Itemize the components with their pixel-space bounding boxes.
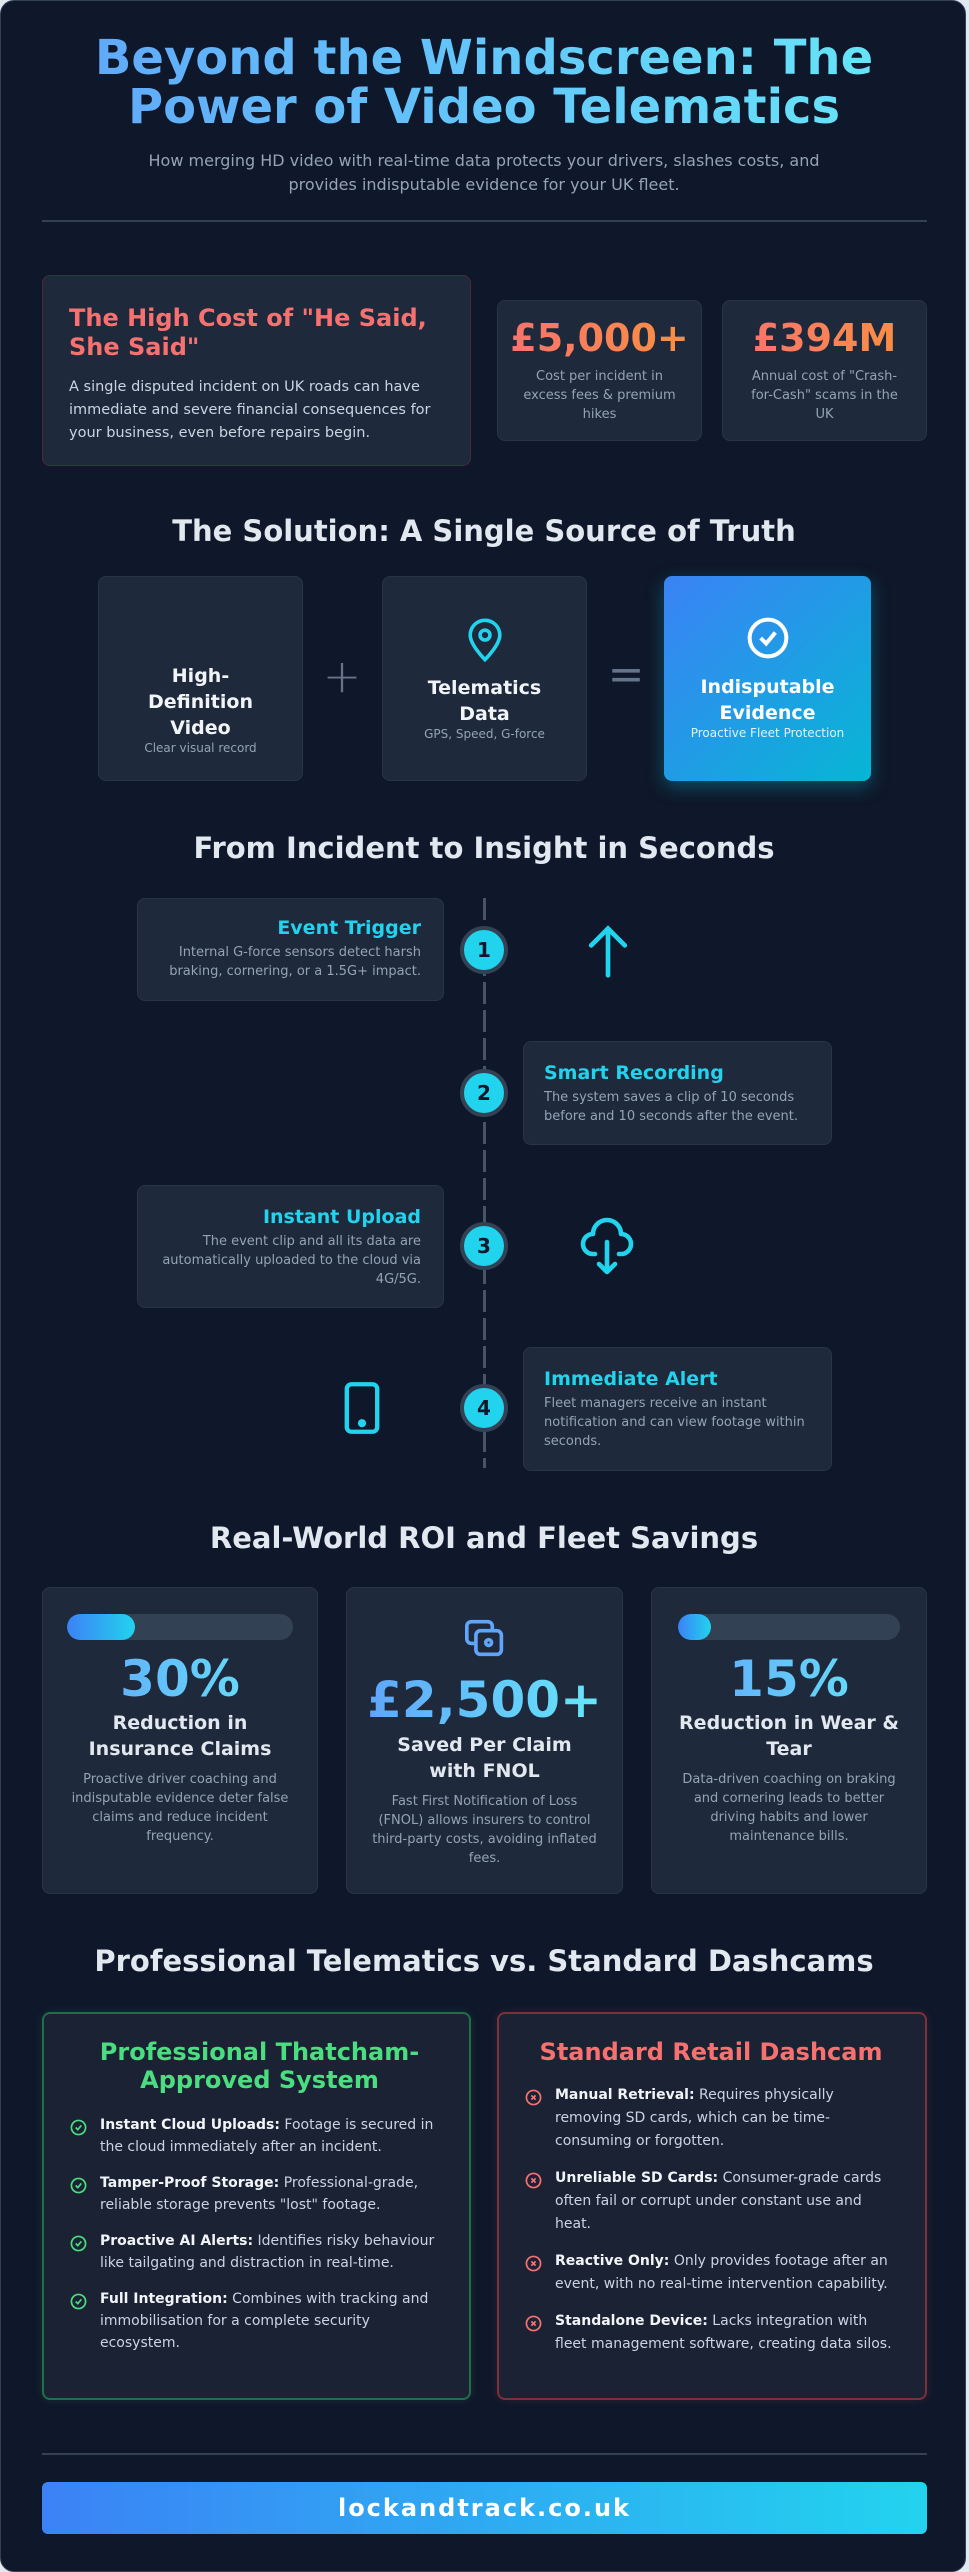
box: evidence: Indisputable — [700, 676, 835, 698]
panel: standard — [497, 2012, 927, 2400]
panel: standard: Reactive Only: Only provides footage after an event, with no real-time intervention capability. — [555, 2253, 888, 2292]
step 3 number — [460, 1222, 508, 1270]
step 1 number — [460, 926, 508, 974]
step 2 number: 2 — [477, 1081, 491, 1105]
heading: comparison: Professional Telematics vs. Standard Dashcams — [94, 1944, 874, 1978]
ROI card 1: Proactive driver coaching and indisputable evidence deter false claims and reduce incident frequency. — [72, 1772, 288, 1844]
heading: ROI: Real-World ROI and Fleet Savings — [210, 1521, 758, 1555]
step 4 card: Fleet managers receive an instant notification and can view footage within seconds. — [544, 1396, 805, 1449]
panel: professional: Full Integration: Combines with tracking and immobilisation for a complete security ecosystem. — [100, 2291, 428, 2351]
icon: check — [748, 618, 788, 658]
step 2 card — [523, 1041, 832, 1145]
ROI card 1: 30% — [120, 1650, 240, 1708]
panel: professional: Instant Cloud Uploads: Footage is secured in the cloud immediately after an incident. — [100, 2117, 433, 2155]
step 1 card: Event Trigger — [277, 917, 421, 939]
ROI card 3: Reduction in Wear & Tear — [679, 1712, 899, 1760]
subtitle: How merging HD video with real-time data protects your drivers, slashes costs, and provides indisputable evidence for your UK fleet. — [149, 151, 819, 194]
icon: phone — [344, 1382, 380, 1434]
box: evidence: Proactive Fleet Protection — [691, 726, 844, 740]
box: telematics: Data — [459, 703, 510, 725]
ROI card 2: £2,500+ — [367, 1671, 602, 1729]
step 3 card: Instant Upload — [263, 1206, 421, 1228]
panel: standard: removing SD cards, which can be time-consuming or forgotten. — [555, 2110, 830, 2149]
panel: standard: Manual Retrieval: Requires physically — [555, 2087, 834, 2103]
step 2 card: The system saves a clip of 10 seconds before and 10 seconds after the event. — [544, 1090, 798, 1124]
icon: cloud — [580, 1218, 634, 1274]
heading: timeline: From Incident to Insight in Seconds — [194, 831, 774, 865]
ROI card 1: Reduction in — [113, 1712, 247, 1734]
box: telematics: GPS, Speed, G-force — [424, 727, 545, 741]
step 1 card: Internal G-force sensors detect harsh braking, cornering, or a 1.5G+ impact. — [169, 945, 421, 979]
stat: 394M: £394M — [753, 316, 896, 360]
box: telematics — [382, 576, 587, 781]
panel: professional: Tamper-Proof Storage: Professional-grade, reliable storage prevents "lost" footage. — [100, 2175, 418, 2213]
panel: standard: Unreliable SD Cards: Consumer-grade cards often fail or corrupt under constant use and heat. — [555, 2170, 881, 2232]
step 1 card — [137, 898, 444, 1001]
box: video — [98, 576, 303, 781]
stat: 5000 — [497, 300, 702, 441]
ROI card 2: Saved Per Claim — [397, 1734, 572, 1756]
problem text: A single disputed incident on UK roads can have immediate and severe financial consequences for your business, even before repairs begin. — [69, 379, 431, 441]
professional heading: Professional Thatcham-Approved System — [100, 2038, 419, 2094]
step 4 card: Immediate Alert — [544, 1368, 718, 1390]
box: video: High-Definition Video — [148, 665, 253, 739]
step 3 card — [137, 1185, 444, 1308]
panel: professional — [42, 2012, 471, 2400]
ROI card 2 — [346, 1587, 623, 1894]
step 3 number: 3 — [477, 1234, 491, 1258]
title: Beyond the Windscreen: The Power of Video Telematics — [95, 30, 873, 135]
ROI card 1: Insurance Claims — [89, 1738, 271, 1760]
stat: 5000: Cost per incident in excess fees & premium hikes — [523, 369, 676, 422]
ROI card 2: Fast First Notification of Loss (FNOL) allows insurers to control third-party costs, avoiding inflated fees. — [372, 1794, 597, 1866]
box: video: Clear visual record — [144, 741, 257, 755]
stat: 394M: Annual cost of "Crash-for-Cash" scams in the UK — [751, 369, 898, 422]
footer bar: lockandtrack.co.uk — [338, 2494, 631, 2522]
icon: arrow up — [588, 925, 628, 978]
icon: pin — [468, 618, 502, 662]
ROI card 1 — [42, 1587, 318, 1894]
ROI card 3: 15% — [729, 1650, 849, 1708]
panel: standard: fleet management software, creating data silos. — [555, 2336, 892, 2352]
panel: professional: Proactive AI Alerts: Identifies risky behaviour like tailgating and distraction in real-time. — [100, 2233, 434, 2271]
equals: = — [608, 649, 644, 700]
step 4 card — [523, 1347, 832, 1471]
stat: 5000: £5,000+ — [510, 316, 689, 360]
panel: problem — [42, 275, 471, 466]
step 4 number — [460, 1384, 508, 1432]
footer bar — [42, 2482, 927, 2534]
heading: solution: The Solution: A Single Source of Truth — [172, 514, 796, 548]
plus: + — [323, 649, 361, 703]
icon: money — [465, 1620, 504, 1656]
problem heading: The High Cost of "He Said, She Said" — [69, 304, 427, 361]
ROI card 2: with FNOL — [429, 1760, 540, 1782]
step 1 number: 1 — [477, 938, 491, 962]
ROI card 3: Data-driven coaching on braking and cornering leads to better driving habits and lower maintenance bills. — [682, 1772, 896, 1844]
step 4 number: 4 — [477, 1396, 491, 1420]
box: evidence — [664, 576, 871, 781]
ROI card 3 — [651, 1587, 927, 1894]
panel: standard: Standalone Device: Lacks integration with — [555, 2313, 867, 2329]
step 3 card: The event clip and all its data are automatically uploaded to the cloud via 4G/5G. — [162, 1234, 421, 1287]
step 2 number — [460, 1069, 508, 1117]
standard heading: Standard Retail Dashcam — [540, 2038, 882, 2066]
step 2 card: Smart Recording — [544, 1062, 724, 1084]
stat: 394M — [722, 300, 927, 441]
box: telematics: Telematics — [428, 677, 541, 699]
timeline — [483, 898, 486, 1468]
box: evidence: Evidence — [719, 702, 816, 724]
